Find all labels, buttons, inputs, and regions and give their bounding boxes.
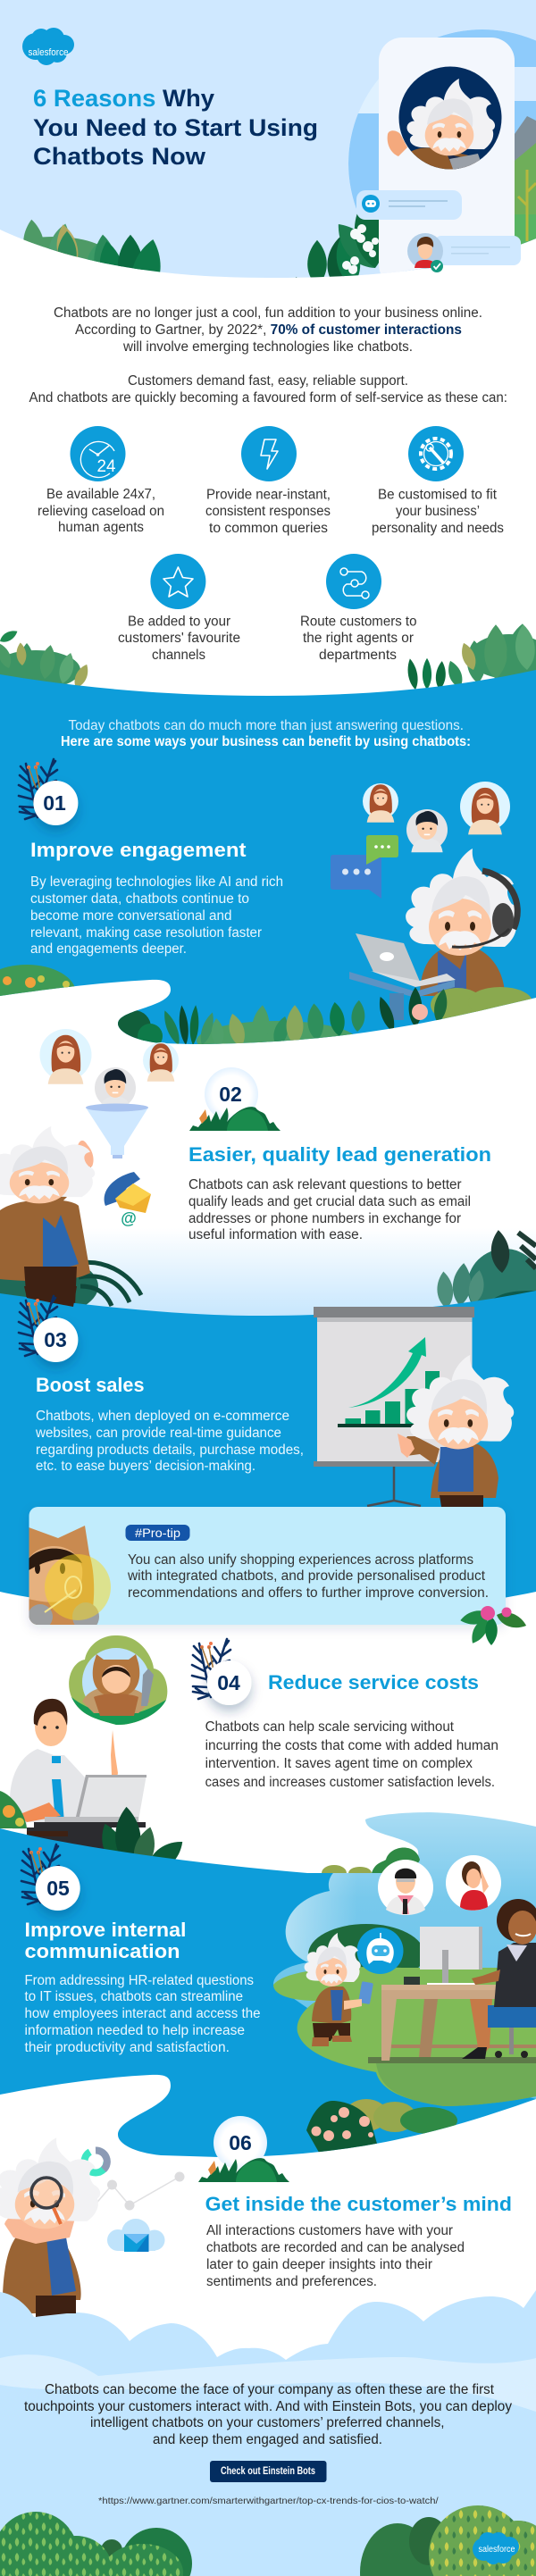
section intro text: Today chatbots can do much more than just answering questions. — [68, 718, 464, 733]
body: customer's mind: later to gain deeper insights into their — [206, 2257, 432, 2272]
feature: favourite channels — [118, 554, 240, 663]
heading: boost sales: Boost sales — [36, 1374, 145, 1396]
footnote: *https://www.gartner.com/smarterwithgartner/top-cx-trends-for-cios-to-watch/ — [98, 2496, 439, 2506]
closing text: Chatbots can become the face of your company as often these are the first — [45, 2382, 495, 2397]
badge 06: 06 — [229, 2131, 252, 2154]
pink flower — [459, 1606, 529, 1646]
body: customer's mind — [206, 2223, 465, 2289]
grass island and office scene — [273, 1899, 536, 2106]
feature: customised: your business’ — [396, 504, 480, 519]
hero scenery behind phone — [348, 29, 536, 272]
icon: clock: 24 — [96, 457, 116, 476]
sky backdrop — [273, 1812, 536, 2099]
monitor — [404, 1927, 482, 1985]
icon: funnel — [86, 1104, 148, 1158]
body: boost sales — [35, 1409, 304, 1474]
heading: internal communication: Improve internal — [25, 1919, 186, 1941]
hero plants right — [295, 213, 379, 278]
body: boost sales: etc. to ease buyers’ decision-making. — [36, 1459, 255, 1474]
trees left — [0, 2512, 192, 2576]
small bushes — [322, 1847, 420, 1873]
badge 06 — [198, 2116, 289, 2182]
portraits: engagement — [363, 782, 510, 852]
flowers bottom — [306, 2099, 457, 2157]
feature: route customers: the right agents or — [303, 631, 414, 646]
feature: near-instant responses: Provide near-instant, — [206, 488, 331, 502]
icon: star — [150, 554, 205, 609]
desk — [381, 1985, 536, 2061]
icon: phone and email — [105, 1172, 151, 1227]
pants over section edge — [24, 1286, 77, 1307]
lower plants — [118, 1000, 364, 1044]
badge 04 group: 04 — [217, 1671, 240, 1694]
body: internal communication: their productivity and satisfaction. — [25, 2040, 230, 2055]
badge 05 — [21, 1844, 80, 1911]
feature: customised — [372, 426, 504, 536]
intro text: Chatbots are no longer just a cool, fun addition to your business online. — [54, 305, 482, 321]
feature: available 24x7 — [38, 426, 164, 535]
body: improve engagement — [30, 874, 283, 957]
icon: lightning bolt — [241, 426, 297, 481]
body: reduce service costs: Chatbots can help scale servicing without — [205, 1719, 455, 1735]
badge 02 — [189, 1067, 281, 1131]
intro text: will involve emerging technologies like chatbots. — [122, 339, 413, 355]
man with laptop — [10, 1699, 147, 1876]
feature: favourite channels: customers' favourite — [118, 631, 240, 646]
icon: clock — [70, 426, 125, 481]
heading: internal communication: communication — [25, 1940, 180, 1962]
Einstein presenting — [398, 1355, 514, 1507]
feature: route customers: departments — [319, 648, 397, 663]
data network with dots — [94, 2172, 184, 2210]
closing text: and keep them engaged and satisfied. — [153, 2432, 382, 2447]
body: improve engagement: relevant, making case resolution faster — [30, 925, 262, 941]
presentation board with chart — [314, 1307, 474, 1506]
gradient band — [0, 1228, 536, 1317]
badge 05: 05 — [46, 1877, 70, 1900]
bushes by Einstein — [379, 987, 532, 1029]
section intro text: Here are some ways your business can benefit by using chatbots: — [61, 734, 471, 749]
Einstein avatar — [388, 66, 502, 179]
body: lead generation: Chatbots can ask relevant questions to better — [188, 1177, 462, 1192]
section intro text — [61, 718, 471, 749]
body: boost sales: regarding products details, purchase modes, — [36, 1443, 304, 1458]
bot chat bubble — [356, 190, 462, 220]
Einstein trousers over cloud — [36, 2308, 76, 2317]
body: boost sales: Chatbots, when deployed on e-commerce — [36, 1409, 289, 1424]
feature: near-instant responses — [205, 426, 331, 536]
pro-tip text — [127, 1552, 489, 1601]
button: Check out Einstein Bots — [221, 2466, 315, 2477]
body: customer's mind: chatbots are recorded and can be analysed — [206, 2240, 465, 2255]
body: internal communication — [25, 1973, 261, 2055]
portraits and funnel — [39, 1029, 179, 1158]
pro-tip card — [28, 1507, 506, 1635]
body: reduce service costs: cases and increases customer satisfaction levels. — [205, 1775, 495, 1790]
feature: route customers — [300, 554, 416, 663]
body: lead generation: useful information with ease. — [188, 1227, 363, 1242]
dark plant under desk — [96, 1806, 188, 1878]
title: 6 Reasons Why — [33, 85, 214, 112]
feature: available 24x7: relieving caseload on — [38, 504, 164, 519]
salesforce logo — [22, 28, 74, 65]
heading: reduce service costs: Reduce service costs — [268, 1671, 479, 1694]
heading: improve engagement: Improve engagement — [30, 839, 247, 861]
body: improve engagement: and engagements deeper. — [30, 941, 187, 957]
title: You Need to Start Using — [33, 114, 318, 141]
badge 03 — [19, 1296, 78, 1362]
chat bubbles — [331, 835, 398, 899]
lighter cloud strip — [0, 2354, 536, 2412]
orange flowers left — [0, 965, 75, 996]
body: reduce service costs: intervention. It saves agent time on complex — [205, 1756, 473, 1771]
pro-tip tag — [125, 1525, 189, 1541]
closing text: touchpoints your customers interact with. And with Einstein Bots, you can deploy — [24, 2399, 512, 2414]
heading: customer's mind: Get inside the customer’s mind — [205, 2193, 512, 2215]
donut chart — [84, 2150, 107, 2172]
salesforce logo footer — [473, 2532, 519, 2564]
arrow — [348, 1337, 426, 1408]
hero plants left — [23, 220, 161, 272]
body: internal communication: From addressing HR-related questions — [25, 1973, 254, 1988]
body: customer's mind: sentiments and preferences. — [206, 2274, 377, 2289]
button — [210, 2461, 327, 2482]
body: customer's mind: All interactions customers have with your — [206, 2223, 453, 2238]
heading: lead generation: Easier, quality lead generation — [188, 1143, 491, 1166]
bar chart — [345, 1371, 440, 1425]
body: improve engagement: By leveraging technologies like AI and rich — [30, 874, 283, 890]
email cloud icon — [107, 2219, 164, 2252]
title: Chatbots Now — [33, 143, 206, 170]
body: internal communication: information needed to help increase — [25, 2023, 245, 2038]
body: boost sales: websites, can provide real-time guidance — [35, 1426, 281, 1441]
blue section: boost sales — [0, 1291, 536, 1614]
body: lead generation — [188, 1177, 471, 1242]
blue section: internal communication — [0, 1828, 536, 2157]
bot icon circle — [357, 1928, 404, 1974]
closing cloud band — [0, 2290, 536, 2576]
badge 02: 02 — [219, 1083, 242, 1106]
title — [33, 85, 318, 170]
badge 04 group — [192, 1639, 252, 1705]
icon: phone and email: @ — [121, 1209, 137, 1227]
icon: gear and wrench — [408, 426, 464, 481]
feature: near-instant responses: to common queries — [209, 521, 328, 536]
feature: available 24x7: Be available 24x7, — [46, 487, 155, 502]
pro-tip text: You can also unify shopping experiences across platforms — [128, 1552, 473, 1568]
badge 01: 01 — [43, 791, 66, 815]
closing text: intelligent chatbots on your customers’ preferred channels, — [90, 2415, 445, 2430]
left flower plant — [0, 1791, 27, 1828]
feature: route customers: Route customers to — [300, 615, 416, 630]
heading: internal communication — [25, 1919, 186, 1962]
body: improve engagement: become more conversational and — [30, 908, 232, 924]
Astro in blob — [69, 1635, 167, 1725]
Einstein arms raised — [0, 1126, 95, 1306]
pro-tip text: recommendations and offers to further improve conversion. — [128, 1585, 489, 1601]
right plant — [436, 1229, 536, 1324]
blue section: engagement — [0, 670, 536, 1044]
body: lead generation: addresses or phone numbers in exchange for — [188, 1211, 461, 1226]
pro-tip text: with integrated chatbots, and provide personalised product — [127, 1568, 486, 1584]
plant behind Einstein — [0, 1255, 141, 1317]
salesforce logo: salesforce — [29, 47, 68, 58]
body: reduce service costs: incurring the costs that come with added human — [205, 1738, 498, 1753]
body: reduce service costs — [205, 1719, 498, 1790]
feature: customised: Be customised to fit — [378, 488, 498, 502]
icon: route path — [326, 554, 381, 609]
user chat bubble — [407, 233, 521, 272]
bot icon — [362, 195, 380, 213]
badge 03: 03 — [44, 1328, 67, 1351]
intro text — [29, 305, 507, 406]
small Einstein with phone — [305, 1933, 373, 2046]
woman at desk — [462, 1899, 536, 2059]
badge 01 — [19, 759, 78, 825]
body: improve engagement: customer data, chatbots continue to — [30, 891, 249, 907]
feature: available 24x7: human agents — [58, 520, 144, 535]
trees right — [360, 2505, 536, 2576]
feature: near-instant responses: consistent responses — [205, 504, 331, 519]
pro-tip tag: #Pro-tip — [135, 1526, 180, 1540]
portraits: internal communication — [378, 1855, 501, 1915]
body: lead generation: qualify leads and get crucial data such as email — [188, 1194, 471, 1209]
Astro mascot — [29, 1526, 111, 1625]
intro text: And chatbots are quickly becoming a favoured form of self-service as these can: — [29, 390, 507, 406]
phone mockup — [379, 38, 515, 288]
Einstein with headset and laptop — [349, 849, 518, 1020]
Einstein with magnifier — [0, 2137, 100, 2322]
intro text: Customers demand fast, easy, reliable support. — [128, 373, 408, 389]
feature: favourite channels: channels — [152, 648, 205, 663]
salesforce logo footer: salesforce — [479, 2545, 515, 2555]
closing text — [24, 2382, 512, 2447]
plants above blue section — [0, 622, 536, 690]
feature: favourite channels: Be added to your — [128, 615, 230, 630]
intro text: According to Gartner, by 2022*, 70% of customer interactions — [75, 322, 462, 338]
body: internal communication: to IT issues, chatbots can streamline — [25, 1989, 243, 2004]
body: internal communication: how employees interact and access the — [25, 2006, 261, 2021]
feature: customised: personality and needs — [372, 521, 504, 536]
